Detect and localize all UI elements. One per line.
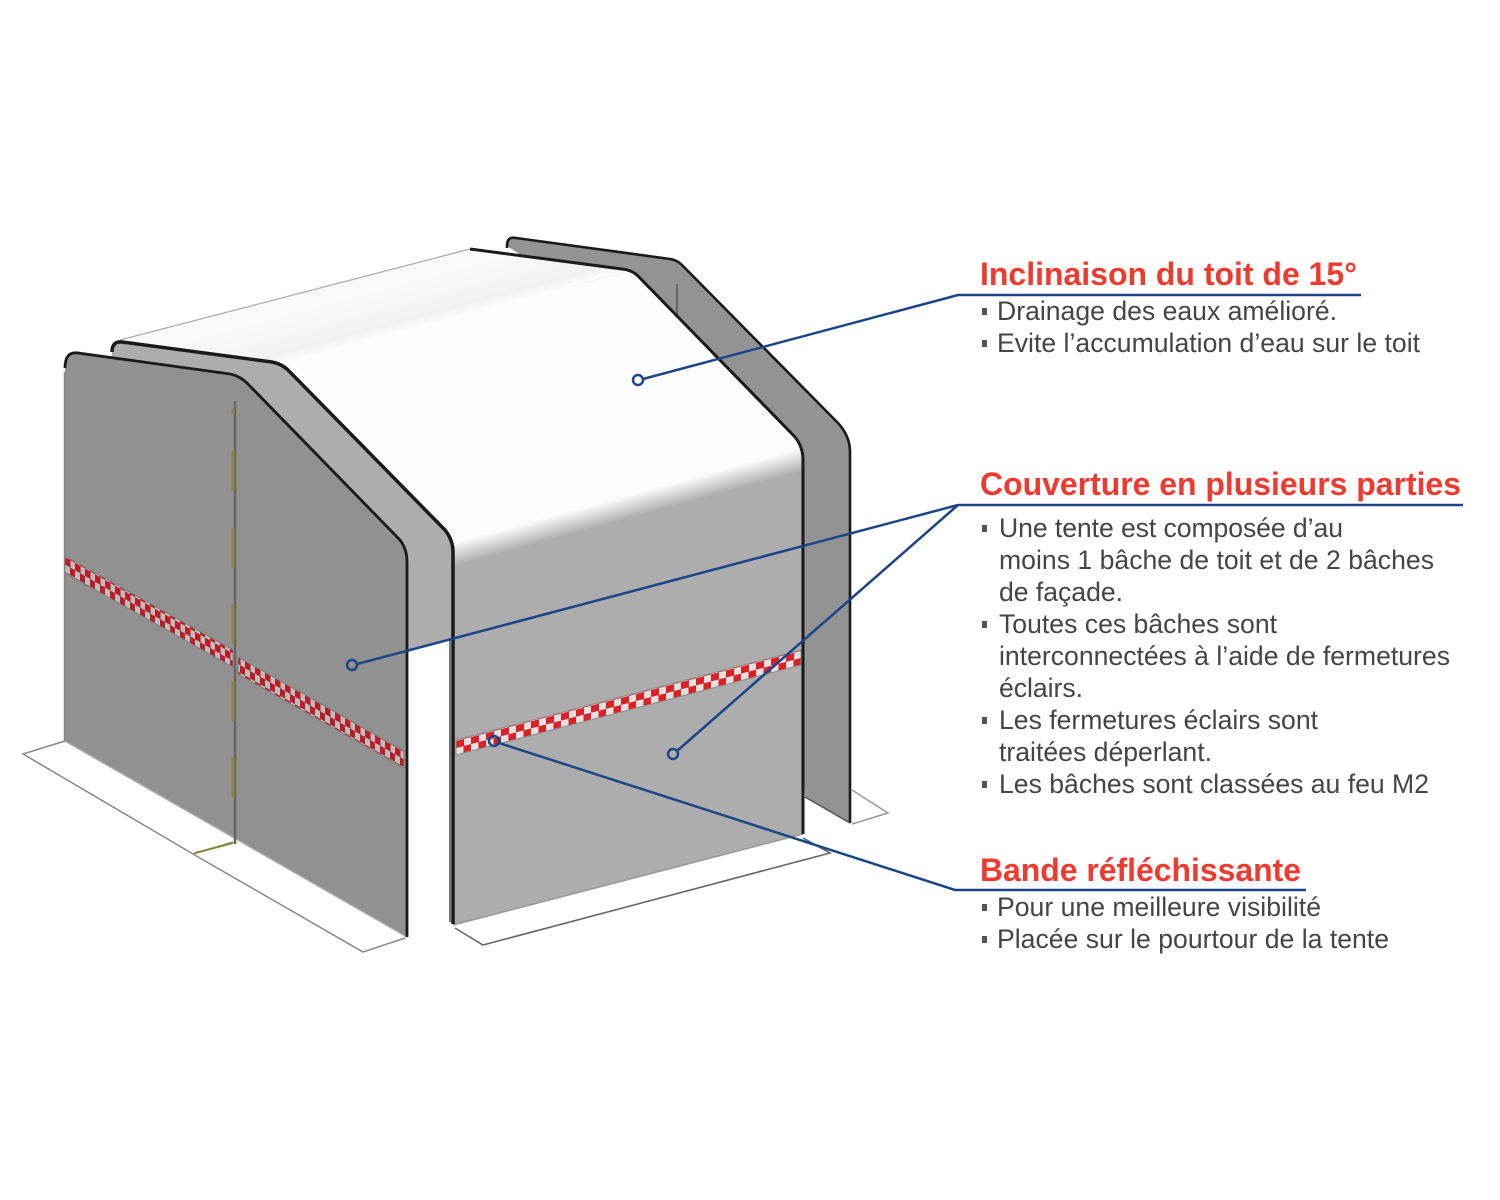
ground flap: left front (23, 741, 405, 952)
door opening left edge highlight (449, 640, 451, 922)
text block: roof pitch: Evite l’accumulation d’eau sur le toit (997, 328, 1421, 358)
left panel outline (65, 353, 407, 937)
text block: multi-part cover (980, 466, 1461, 799)
roof outline (470, 249, 803, 834)
callout line: cover parts (347, 505, 1463, 759)
callout line: roof slope (633, 295, 1361, 385)
left panel left edge (64, 372, 66, 741)
text block: multi-part cover: Une tente est composée d’au (999, 513, 1343, 543)
heading: reflective strip: Bande réfléchissante (980, 852, 1301, 888)
text block: multi-part cover: Les bâches sont classées au feu M2 (999, 769, 1429, 799)
rear facade panel (507, 238, 850, 823)
text block: reflective strip: Pour une meilleure visibilité (997, 892, 1321, 922)
text block: multi-part cover: interconnectées à l’aide de fermetures (999, 641, 1450, 671)
front long side lower face and roof slope (282, 270, 803, 925)
rear panel bottom edge (805, 797, 850, 823)
text block: multi-part cover: Les fermetures éclairs sont (999, 705, 1319, 735)
text block: multi-part cover: moins 1 bâche de toit et de 2 bâches (999, 545, 1434, 575)
text block: multi-part cover: Toutes ces bâches sont (999, 609, 1278, 639)
gable outline (112, 342, 453, 924)
text block: reflective strip: Placée sur le pourtour de la tente (997, 924, 1389, 954)
rear panel zipper (676, 284, 678, 320)
front face bottom edge (453, 834, 803, 925)
left panel bottom edge (65, 741, 407, 937)
text block: multi-part cover: traitées déperlant. (999, 737, 1212, 767)
zipper on left panel (195, 401, 235, 853)
reflective strip: front face (456, 650, 801, 755)
callout line: reflective strip (489, 736, 1306, 890)
ground flap: rear (852, 790, 888, 824)
tent illustration (23, 238, 888, 952)
heading: multi-part cover: Couverture en plusieurs parties (980, 466, 1461, 502)
text block: multi-part cover: de façade. (999, 577, 1123, 607)
upper roof slope (120, 249, 632, 364)
roof top edge (120, 249, 470, 340)
reflective strip: left panel (65, 556, 404, 768)
text block: reflective strip (980, 852, 1389, 954)
rear panel outline (507, 238, 850, 823)
left facade panel (65, 353, 407, 937)
heading: roof pitch: Inclinaison du toit de 15° (980, 256, 1357, 292)
ground flap: right front (455, 838, 830, 945)
text block: roof pitch (980, 256, 1421, 358)
gable cover band (112, 342, 453, 652)
text block: roof pitch: Drainage des eaux amélioré. (997, 296, 1337, 326)
text block: multi-part cover: éclairs. (999, 673, 1083, 703)
